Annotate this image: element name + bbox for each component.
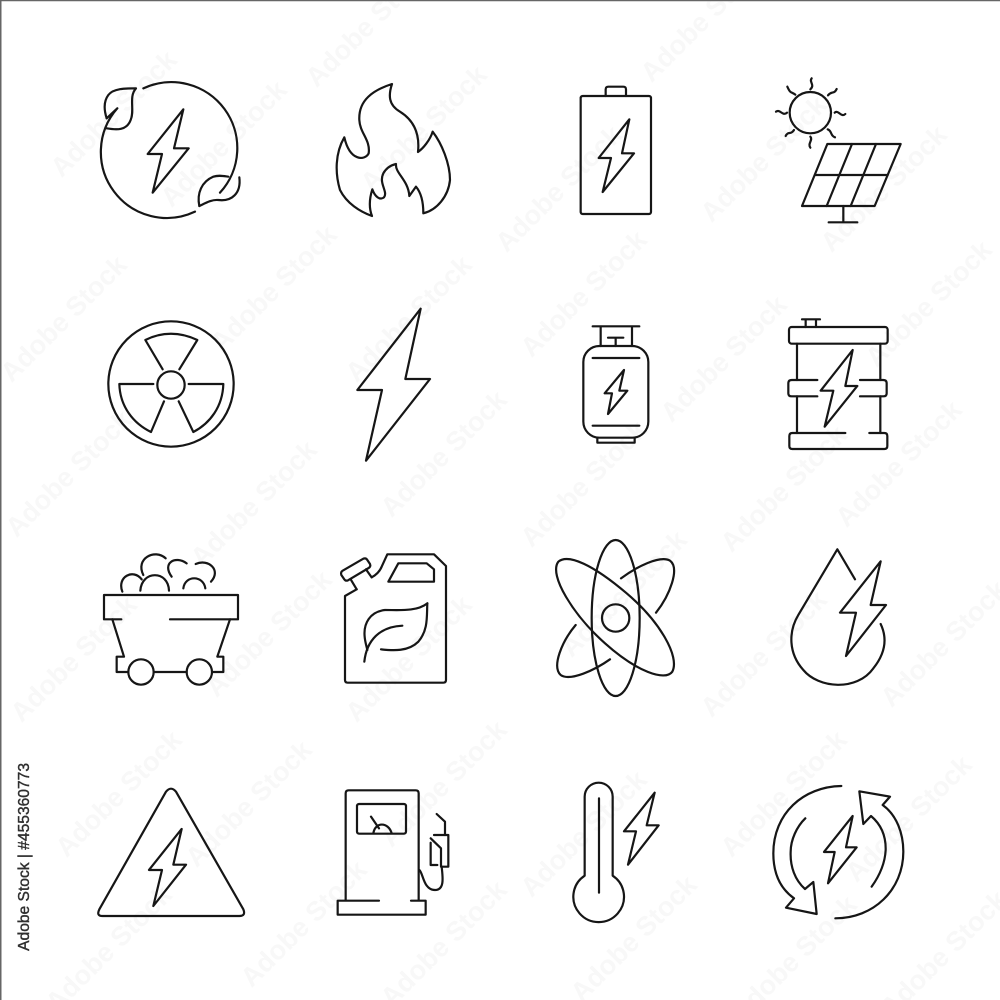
watermark pattern: Adobe Stock [155, 74, 293, 213]
icon: oil barrel with bolt [788, 319, 888, 449]
icon: biofuel canister [341, 554, 446, 683]
watermark pattern: Adobe Stock [0, 404, 138, 543]
icon: gas cylinder [583, 326, 648, 443]
icon: battery [581, 87, 651, 214]
watermark pattern: Adobe Stock [830, 394, 968, 533]
watermark pattern: Adobe Stock [515, 414, 653, 553]
watermark pattern: Adobe Stock [490, 119, 628, 258]
icon: water drop with bolt [791, 549, 886, 685]
watermark pattern: Adobe Stock [375, 714, 513, 853]
watermark pattern: Adobe Stock [200, 564, 338, 703]
icon: flame [337, 84, 450, 216]
watermark pattern: Adobe Stock [340, 249, 478, 388]
watermark pattern: Adobe Stock [180, 734, 318, 873]
watermark pattern: Adobe Stock [695, 89, 833, 228]
watermark pattern: Adobe Stock [515, 764, 653, 903]
watermark pattern: Adobe Stock [840, 749, 978, 888]
icon: thermometer with bolt [573, 783, 659, 922]
icon: atom [556, 540, 674, 696]
icon: high voltage warning triangle [98, 789, 244, 916]
watermark pattern: Adobe Stock [695, 584, 833, 723]
watermark pattern: Adobe Stock [50, 724, 188, 863]
watermark pattern: Adobe Stock [860, 234, 998, 373]
watermark pattern: Adobe Stock [340, 589, 478, 728]
icon: fuel pump [338, 790, 448, 915]
icon: sun and solar panel [776, 78, 901, 222]
icon group: top-left quadrant [101, 82, 450, 461]
icon: energy refresh arrows [773, 786, 903, 918]
watermark pattern: Adobe Stock [235, 854, 373, 993]
icon group: lower-left quadrant [98, 554, 448, 916]
watermark pattern: Adobe Stock [355, 59, 493, 198]
icon: renewable energy circle with leaves [101, 82, 240, 218]
watermark pattern: Adobe Stock [815, 119, 953, 258]
watermark pattern: Adobe Stock [5, 589, 143, 728]
watermark pattern: Adobe Stock [205, 219, 343, 358]
watermark pattern: Adobe Stock [375, 384, 513, 523]
icon group: top-right quadrant [581, 78, 901, 449]
icon: large lightning bolt [357, 309, 430, 461]
watermark pattern: Adobe Stock [45, 44, 183, 183]
watermark pattern: Adobe Stock [555, 524, 693, 663]
watermark pattern: Adobe Stock [715, 724, 853, 863]
watermark pattern: Adobe Stock [655, 289, 793, 428]
icon: radiation symbol [108, 321, 234, 447]
watermark pattern: Adobe Stock [715, 419, 853, 558]
icon group: lower-right quadrant [556, 540, 903, 922]
watermark pattern: Adobe Stock [185, 434, 323, 573]
watermark pattern: Adobe Stock [515, 224, 653, 363]
stock image id text: Adobe Stock | #455360773 [16, 763, 33, 951]
icon: coal mine cart [104, 554, 238, 685]
